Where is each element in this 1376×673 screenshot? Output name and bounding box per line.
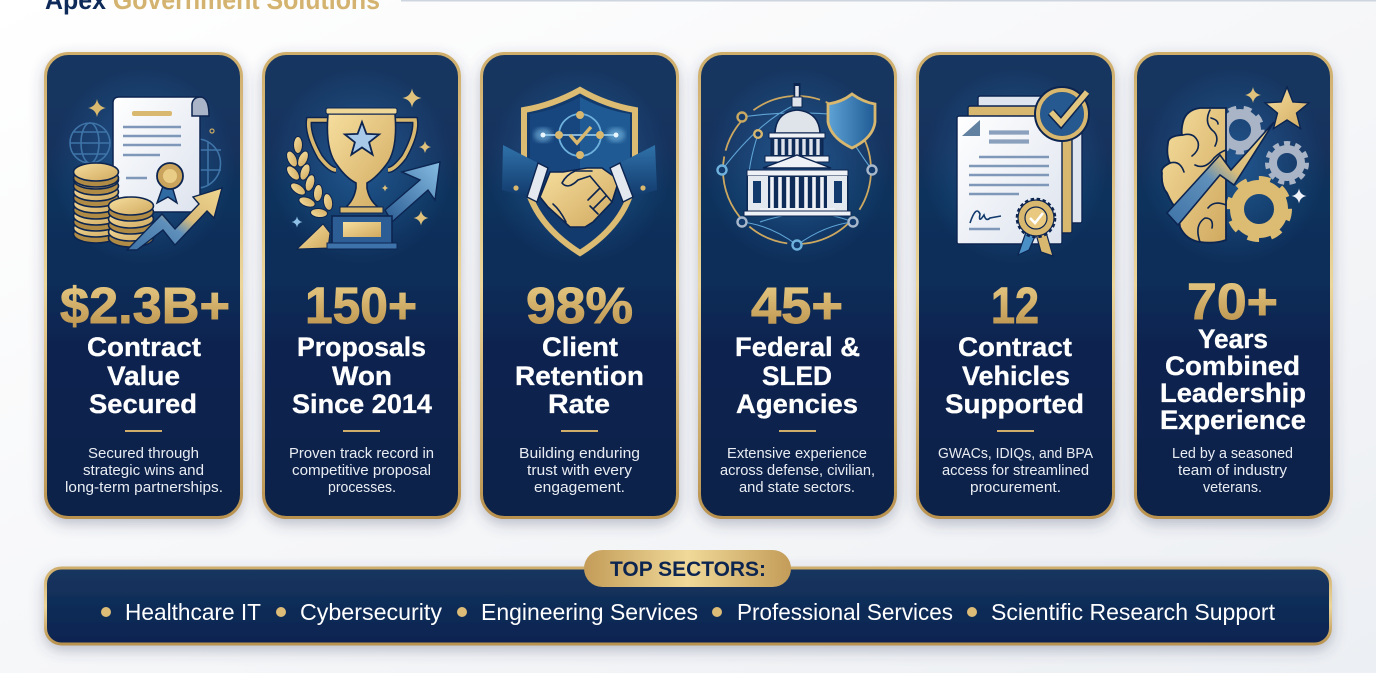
title: years combined leadership experience: Experience (1160, 405, 1306, 435)
description: contract vehicles (938, 446, 1093, 496)
description: leadership experience: team of industry (1178, 463, 1288, 479)
title: contract value secured: Contract (87, 332, 201, 362)
title: client retention rate (515, 332, 644, 419)
title: contract value secured (87, 332, 201, 419)
sector list: Engineering Services (481, 599, 698, 625)
description: contract value: Secured through (88, 446, 199, 462)
description: client retention: trust with every (527, 463, 633, 479)
title: years combined leadership experience: Years (1198, 324, 1268, 354)
description: contract vehicles: GWACs, IDIQs, and BPA (938, 446, 1093, 462)
description: leadership experience: Led by a seasoned (1172, 446, 1293, 462)
title: federal and SLED agencies: SLED (762, 361, 832, 391)
sector list: Cybersecurity (300, 599, 442, 625)
description: contract vehicles: access for streamlined (942, 463, 1089, 479)
panel: proposals won (264, 54, 460, 518)
description: leadership experience: veterans. (1203, 480, 1262, 496)
title: proposals won since 2014 (292, 332, 432, 419)
description: proposals won: processes. (328, 480, 396, 496)
sector list: Scientific Research Support (991, 599, 1276, 625)
title: federal and SLED agencies (735, 332, 860, 419)
description: agencies: Extensive experience (727, 446, 867, 462)
title: years combined leadership experience: Combined (1165, 351, 1300, 381)
title: proposals won since 2014: Proposals (297, 332, 426, 362)
icon: contract, coins and growth arrow (70, 97, 222, 250)
stat: leadership experience: 70+ (1187, 273, 1278, 330)
stat: contract vehicles: 12 (991, 277, 1039, 334)
title: client retention rate: Client (542, 332, 618, 362)
title: years combined leadership experience (1160, 324, 1306, 435)
description: contract value: strategic wins and (83, 463, 204, 479)
stat: agencies: 45+ (751, 277, 843, 334)
title: contract vehicles supported: Vehicles (962, 361, 1070, 391)
panel: client retention (482, 54, 678, 518)
description: leadership experience (1172, 446, 1293, 496)
title: proposals won since 2014: Since 2014 (292, 389, 432, 419)
title: contract value secured: Secured (89, 389, 197, 419)
description: agencies (720, 446, 875, 496)
title: proposals won since 2014: Won (332, 361, 392, 391)
icon: shield and handshake (502, 90, 657, 253)
title: client retention rate: Retention (515, 361, 644, 391)
title: client retention rate: Rate (548, 389, 610, 419)
description: proposals won: Proven track record in (289, 446, 434, 462)
badge: top sectors (584, 550, 791, 587)
title: contract value secured: Value (107, 361, 180, 391)
title: contract vehicles supported: Supported (945, 389, 1084, 419)
description: client retention (519, 446, 640, 496)
title: years combined leadership experience: Leadership (1160, 378, 1306, 408)
description: client retention: Building enduring (519, 446, 640, 462)
description: contract vehicles: procurement. (970, 480, 1061, 496)
stat: contract value: $2.3B+ (60, 277, 230, 334)
sector list: Professional Services (737, 599, 953, 625)
title: federal and SLED agencies: Federal & (735, 332, 860, 362)
icon: trophy with laurel and arrow (284, 88, 440, 249)
icon: brain, gears, arrow and star (1162, 87, 1309, 243)
description: contract value (65, 446, 223, 496)
description: agencies: and state sectors. (739, 480, 855, 496)
panel: leadership experience (1136, 54, 1332, 518)
title: contract vehicles supported (945, 332, 1084, 419)
stat: client retention: 98% (526, 277, 633, 334)
description: proposals won (289, 446, 434, 496)
icon: contract documents with check and seal (957, 89, 1087, 256)
icon: capitol in network ring with shield (718, 83, 876, 250)
title: federal and SLED agencies: Agencies (736, 389, 858, 419)
description: agencies: across defense, civilian, (720, 463, 875, 479)
panel: agencies (700, 54, 896, 518)
description: client retention: engagement. (534, 480, 625, 496)
sector list (101, 599, 1276, 625)
description: proposals won: competitive proposal (292, 463, 431, 479)
sector list: Healthcare IT (125, 599, 261, 625)
panel: contract vehicles (918, 54, 1114, 518)
panel: contract value (46, 54, 242, 518)
stat: proposals won: 150+ (305, 277, 417, 334)
title: contract vehicles supported: Contract (958, 332, 1072, 362)
panel: top sectors bar (46, 550, 1330, 644)
description: contract value: long-term partnerships. (65, 480, 223, 496)
badge: top sectors: TOP SECTORS: (610, 558, 766, 581)
